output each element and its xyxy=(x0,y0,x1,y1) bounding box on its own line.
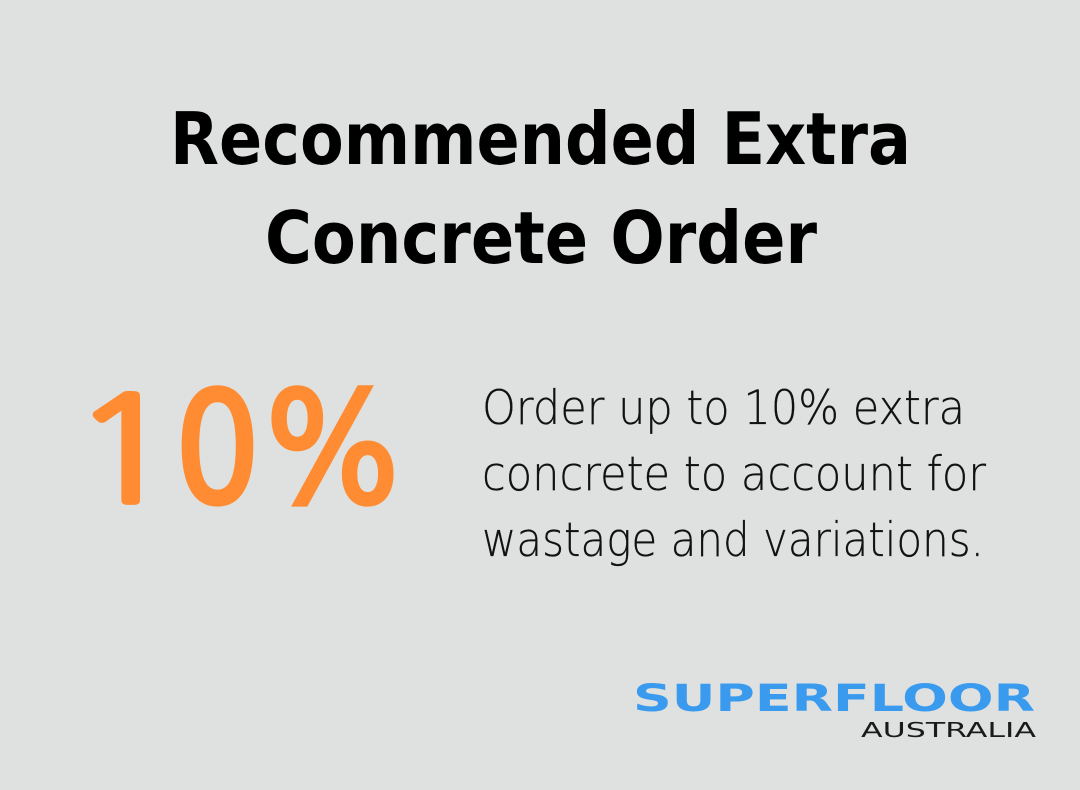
logo: Superfloor Australia xyxy=(633,677,1036,742)
big statistic: 10%: % xyxy=(266,360,399,539)
title: Concrete Order xyxy=(265,197,817,281)
description text: wastage and variations. xyxy=(482,513,984,568)
title: Recommended Extra xyxy=(170,98,911,182)
logo: Superfloor Australia: SUPERFLOOR xyxy=(633,677,1035,720)
description text xyxy=(482,381,987,568)
description text: Order up to 10% extra xyxy=(482,381,965,436)
description text: concrete to account for xyxy=(482,447,987,502)
title xyxy=(170,98,911,281)
logo: Superfloor Australia: AUSTRALIA xyxy=(861,718,1036,742)
big statistic: 10%: 0 xyxy=(175,360,260,539)
big statistic: 10%: 1 xyxy=(70,378,180,524)
big statistic: 10% xyxy=(70,360,399,539)
